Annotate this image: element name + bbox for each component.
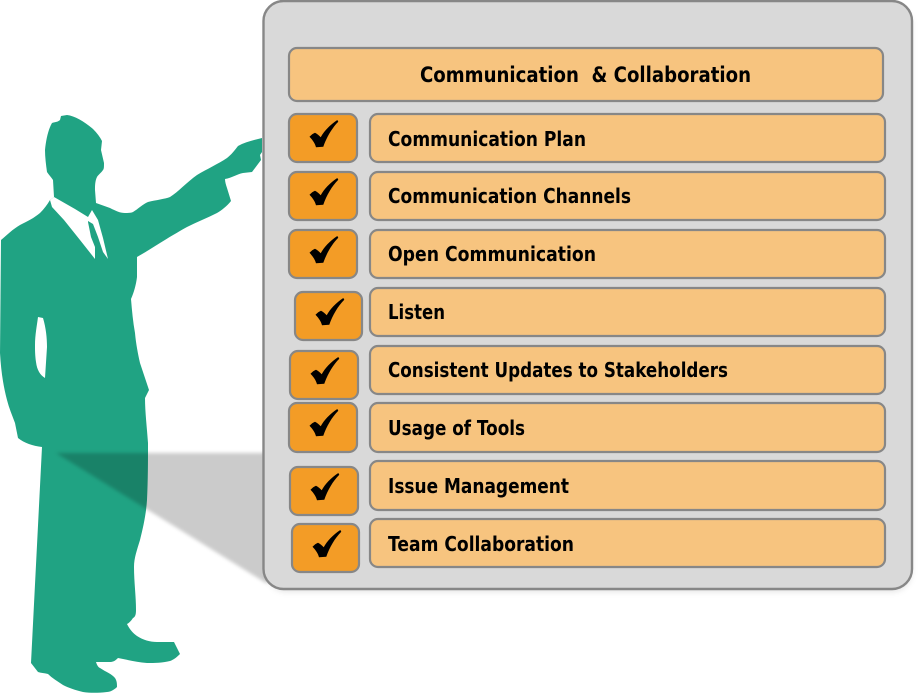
item: Open Communication (289, 230, 885, 278)
item: Issue Management (290, 461, 885, 515)
heading bar (289, 48, 883, 101)
item: Open Communication: Open Communication (388, 242, 596, 266)
jacket pocket gap (35, 317, 47, 378)
heading bar: Communication & Collaboration (420, 63, 751, 87)
item: Usage of Tools: Usage of Tools (388, 416, 525, 440)
item: Communication Plan: Communication Plan (388, 127, 586, 151)
figure: teal businessman silhouette (0, 115, 262, 693)
panel shadow cast across figure (56, 453, 285, 583)
item: Communication Channels (289, 172, 885, 220)
item: Usage of Tools (289, 403, 885, 452)
soft panel drop shadow (266, 5, 912, 592)
item: Consistent Updates to Stakeholders: Consistent Updates to Stakeholders (388, 358, 728, 382)
item: Listen: Listen (388, 300, 445, 324)
item: Communication Plan (289, 114, 885, 162)
item: Issue Management: Issue Management (388, 474, 569, 498)
item: Team Collaboration (292, 519, 885, 572)
item: Communication Channels: Communication Channels (388, 184, 631, 208)
item: Team Collaboration: Team Collaboration (388, 532, 574, 556)
item: Consistent Updates to Stakeholders (290, 346, 885, 399)
item: Listen (295, 288, 885, 340)
collar and shirt (50, 197, 108, 259)
main grey panel (264, 1, 912, 589)
